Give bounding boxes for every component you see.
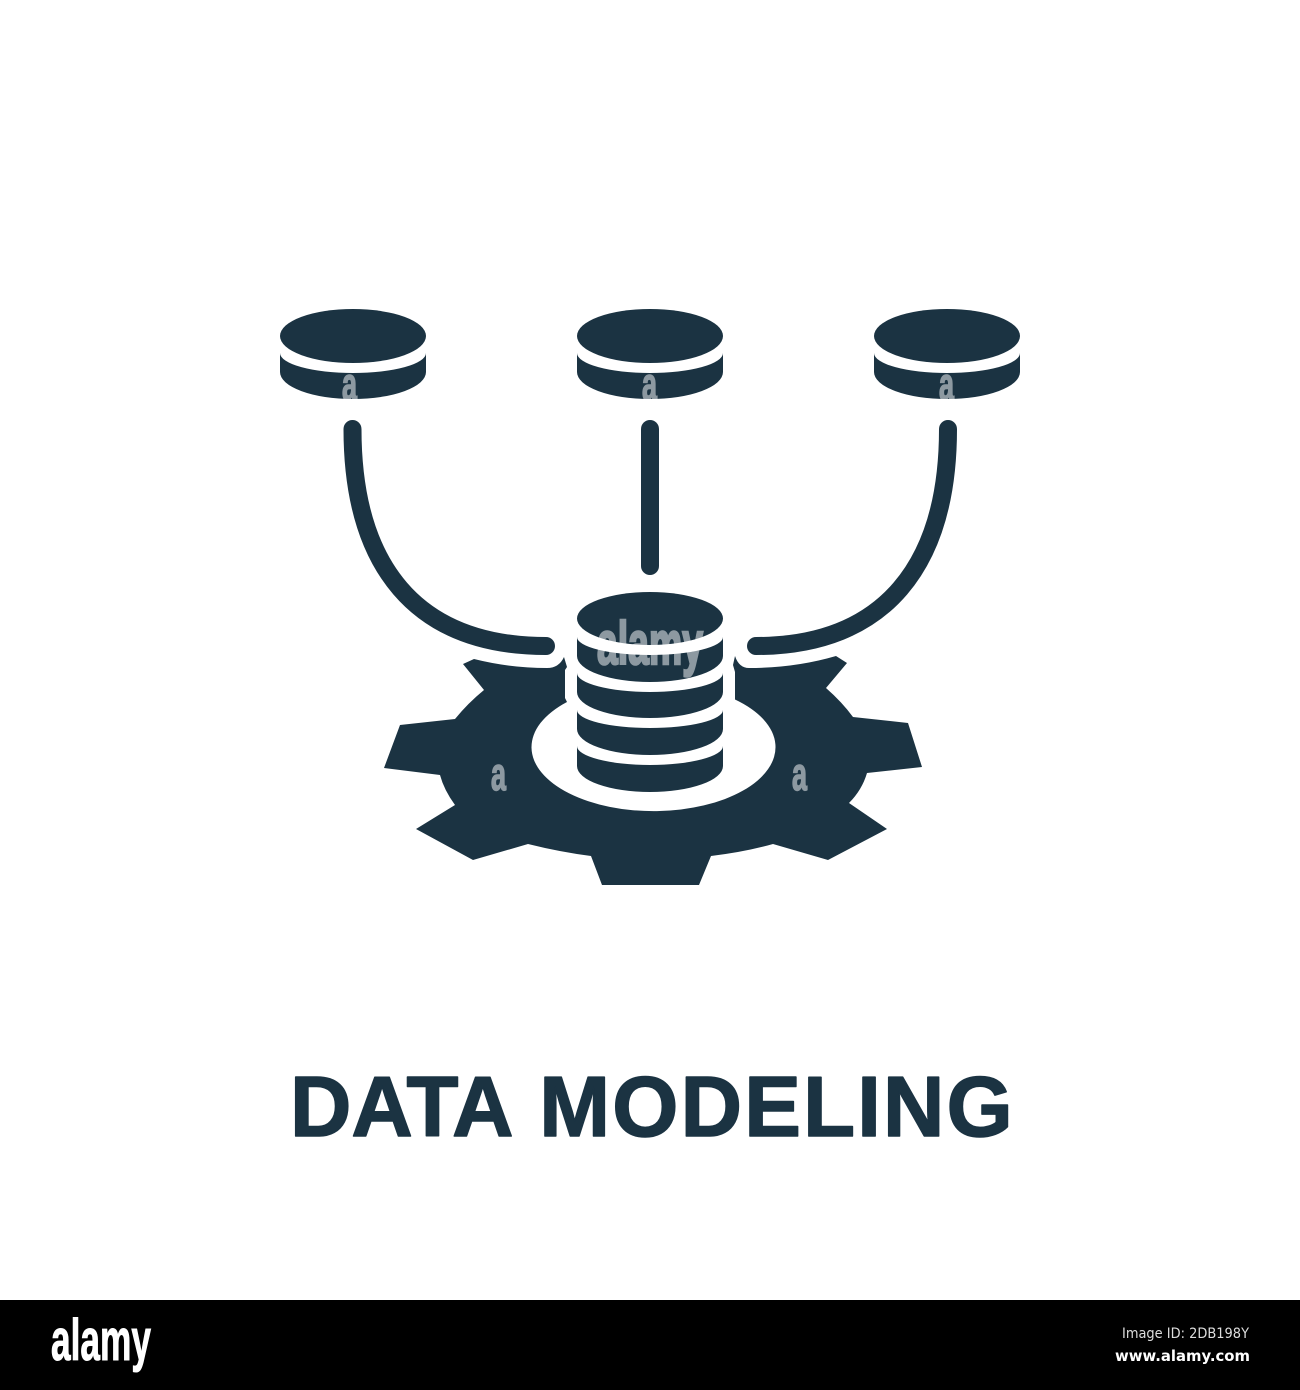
icon: right disk: [874, 309, 1020, 399]
icon: middle disk: [577, 309, 723, 399]
watermark: alamy centre: alamy: [597, 610, 703, 677]
connector: centre line: [641, 429, 659, 566]
icon: left disk: [280, 309, 426, 399]
image id: Image ID: 2DB198Y: [1122, 1326, 1249, 1342]
footer bar: [0, 1300, 1300, 1390]
icon: database stack: [577, 592, 723, 792]
connector: right curve: [756, 429, 948, 646]
watermark: letter marks: a: [491, 748, 506, 800]
logo: alamy: alamy: [51, 1308, 151, 1373]
watermark: letter marks: a: [939, 358, 954, 410]
watermark: letter marks: a: [792, 748, 807, 800]
icon: gear: [384, 656, 922, 885]
watermark: letter marks: [342, 358, 954, 800]
watermark: letter marks: a: [642, 358, 657, 410]
title: DATA MODELING: [290, 1060, 1015, 1155]
watermark: letter marks: a: [342, 358, 357, 410]
icon: data modeling: [280, 309, 1020, 885]
website: www.alamy.com: [1115, 1347, 1250, 1365]
connector: left curve: [352, 429, 546, 646]
